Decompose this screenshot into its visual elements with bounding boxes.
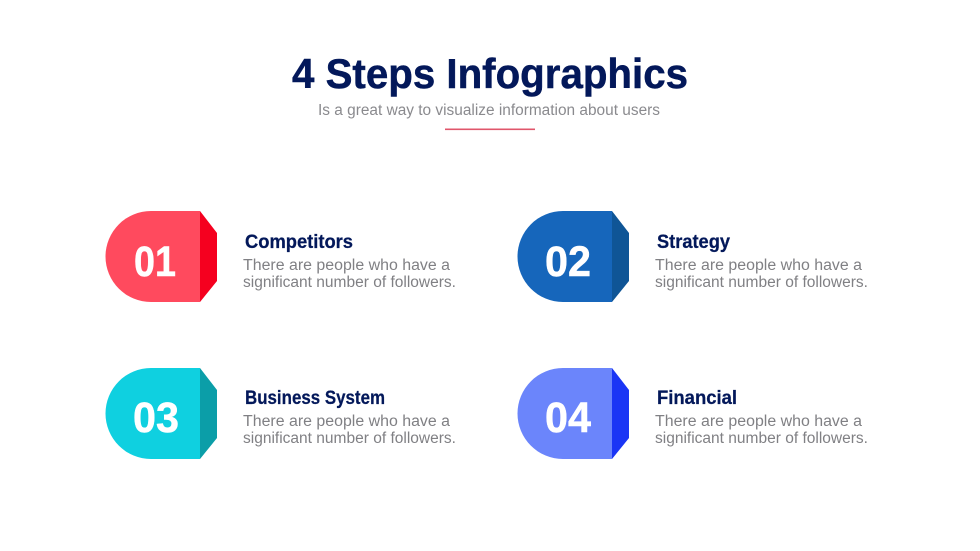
- badge 04 front face: [518, 368, 612, 459]
- description 02: significant number of followers.: [655, 274, 868, 291]
- description 02: [655, 257, 868, 291]
- heading: financial: Financial: [657, 388, 737, 409]
- heading: business system: Business System: [245, 388, 385, 409]
- description 01: significant number of followers.: [243, 274, 456, 291]
- heading: strategy: Strategy: [657, 232, 730, 253]
- description 03: [243, 413, 456, 447]
- heading: competitors: Competitors: [245, 232, 353, 253]
- badge 02 side face: [612, 211, 629, 302]
- number 02: 02: [545, 238, 591, 286]
- description 02: There are people who have a: [655, 257, 862, 274]
- step 02: strategy: [518, 211, 868, 302]
- badge 03 front face: [106, 368, 200, 459]
- description 04: [655, 413, 868, 447]
- badge 01 side face: [200, 211, 217, 302]
- description 04: significant number of followers.: [655, 430, 868, 447]
- number 01: 01: [134, 238, 176, 286]
- subtitle: Is a great way to visualize information about users: [318, 102, 660, 119]
- badge 04 side face: [612, 368, 629, 459]
- number 03: 03: [133, 394, 179, 442]
- step 03: business system: [106, 368, 456, 459]
- badge 01 front face: [106, 211, 200, 302]
- step 01: competitors: [106, 211, 456, 302]
- badge 02 front face: [518, 211, 612, 302]
- description 03: significant number of followers.: [243, 430, 456, 447]
- badge 03 side face: [200, 368, 217, 459]
- number 04: 04: [545, 394, 591, 442]
- description 03: There are people who have a: [243, 413, 450, 430]
- step 04: financial: [518, 368, 868, 459]
- title: 4 Steps Infographics: [292, 50, 688, 97]
- description 01: [243, 257, 456, 291]
- accent underline: [445, 128, 535, 130]
- description 01: There are people who have a: [243, 257, 450, 274]
- description 04: There are people who have a: [655, 413, 862, 430]
